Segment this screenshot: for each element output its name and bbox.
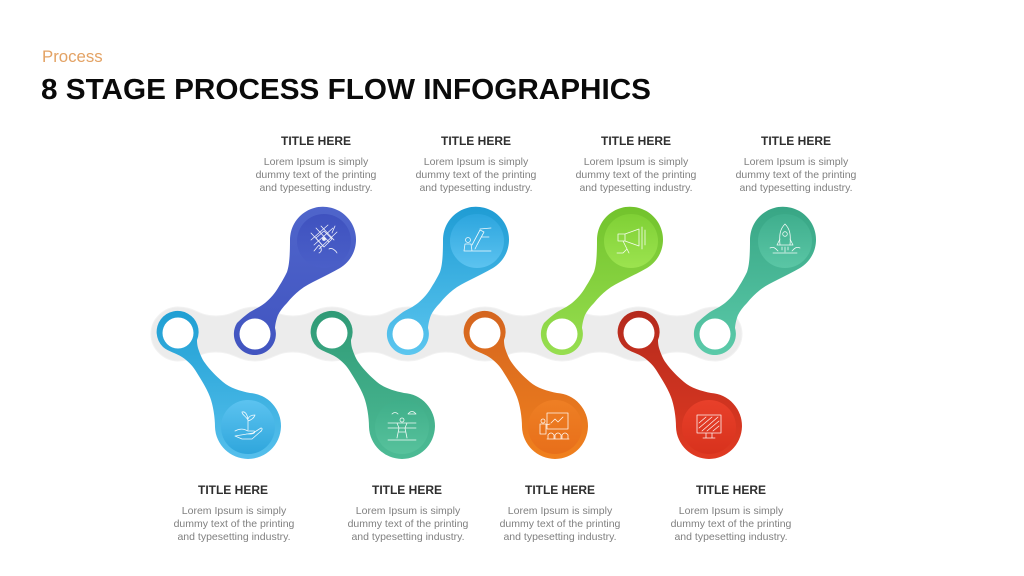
text block: bottom 4 [671,483,792,543]
icon: person with chart [464,228,491,251]
text block: bottom 1 [174,483,295,543]
text block: bottom 2: Lorem Ipsum is simply [356,505,461,517]
stage 6: lime top drop [541,207,663,355]
text block: bottom 4: and typesetting industry. [674,531,788,543]
text block: bottom 3: dummy text of the printing [500,518,621,530]
text block: bottom 1: and typesetting industry. [177,531,291,543]
stage 5: orange bottom drop [464,311,588,459]
stage 8: teal top drop [694,207,816,355]
text block: bottom 4: dummy text of the printing [671,518,792,530]
text block: top 4: Lorem Ipsum is simply [744,156,849,168]
text block: bottom 3: TITLE HERE [525,483,595,497]
text block: top 1: and typesetting industry. [259,182,373,194]
text block: bottom 2: TITLE HERE [372,483,442,497]
text block: top 4: TITLE HERE [761,134,831,148]
text block: top 2: dummy text of the printing [416,169,537,181]
text block: bottom 2 [348,483,469,543]
icon: presenter and audience [540,413,569,439]
text block: top 1 [256,134,377,194]
text block: bottom 1: dummy text of the printing [174,518,295,530]
text block: bottom 3: and typesetting industry. [503,531,617,543]
text block: top 3: Lorem Ipsum is simply [584,156,689,168]
subtitle: Process: Process [42,47,103,66]
text block: top 1: Lorem Ipsum is simply [264,156,369,168]
text block: top 1: dummy text of the printing [256,169,377,181]
text block: bottom 3: Lorem Ipsum is simply [508,505,613,517]
grey timeline band [151,307,742,361]
main heading: 8 STAGE PROCESS FLOW INFOGRAPHICS [41,74,651,106]
text block: bottom 1: Lorem Ipsum is simply [182,505,287,517]
text block: bottom 4: TITLE HERE [696,483,766,497]
stage 1: light blue bottom drop [157,311,281,459]
icon: plant in hand [235,412,262,439]
icon: circuit chip [311,225,337,253]
text block: top 1: TITLE HERE [281,134,351,148]
icon: monitor [697,415,721,438]
text block: top 2: and typesetting industry. [419,182,533,194]
text block: top 3 [576,134,697,194]
text block: top 4: dummy text of the printing [736,169,857,181]
stage 4: sky blue top drop [387,207,509,355]
text block: bottom 1: TITLE HERE [198,483,268,497]
icon: megaphone [617,227,645,253]
text block: top 3: TITLE HERE [601,134,671,148]
text block: top 3: dummy text of the printing [576,169,697,181]
text block: top 2: TITLE HERE [441,134,511,148]
text block: bottom 2: dummy text of the printing [348,518,469,530]
icon: rocket [770,224,800,253]
text block: bottom 3 [500,483,621,543]
stage 3: green bottom drop [311,311,435,459]
text block: top 4 [736,134,857,194]
text block: bottom 4: Lorem Ipsum is simply [679,505,784,517]
text block: top 2: Lorem Ipsum is simply [424,156,529,168]
icon: figure lifting a bar [388,412,416,440]
text block: top 3: and typesetting industry. [579,182,693,194]
text block: top 4: and typesetting industry. [739,182,853,194]
stage 2: indigo top drop [234,207,356,355]
text block: bottom 2: and typesetting industry. [351,531,465,543]
stage 7: red bottom drop [618,311,742,459]
text block: top 2 [416,134,537,194]
